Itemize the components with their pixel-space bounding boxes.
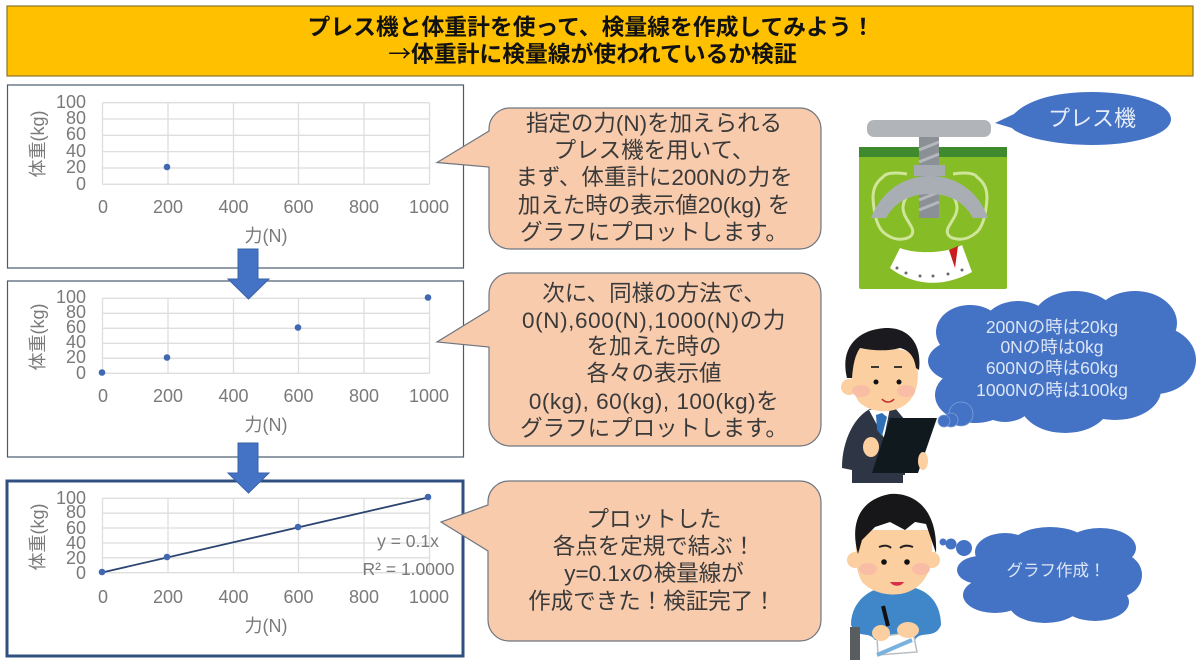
panel: chart step 1: 0 (76, 174, 86, 194)
cloud: measured values: 0Nの時は0kg (1000, 337, 1104, 357)
panel: chart step 1: 1000 (409, 197, 449, 217)
panel: chart step 1: 0 (98, 197, 108, 217)
cloud: graph creation: グラフ作成！ (1006, 561, 1106, 580)
panel: chart step 3 with calibration line: 0 (76, 563, 86, 583)
cloud: measured values: 600Nの時は60kg (986, 358, 1118, 378)
title banner (7, 6, 1193, 76)
panel: chart step 2 (8, 281, 464, 457)
callout: step 1: まず、体重計に200Nの力を (515, 165, 793, 190)
icon: man with clipboard (841, 328, 937, 483)
panel: chart step 2: 40 (66, 332, 86, 352)
panel: chart step 3 with calibration line: 200 (153, 587, 183, 607)
cloud: measured values: 1000Nの時は100kg (976, 380, 1128, 400)
panel: chart step 1: 体重(kg) (28, 110, 48, 178)
panel: chart step 2: 体重(kg) (28, 304, 48, 370)
callout: step 2: を加えた時の (586, 334, 722, 359)
callout: step 1: グラフにプロットします。 (520, 220, 788, 245)
title banner: →体重計に検量線が使われているか検証 (388, 36, 797, 69)
callout: step 2: グラフにプロットします。 (520, 416, 788, 441)
callout: step 2: 各々の表示値 (586, 361, 722, 386)
panel: chart step 2: 20 (66, 347, 86, 367)
callout: press machine label (995, 92, 1171, 145)
panel: chart step 1 (8, 85, 464, 268)
panel: chart step 1: 60 (66, 124, 86, 144)
callout: step 1: 加えた時の表示値20(kg) を (518, 193, 790, 218)
panel: chart step 3 with calibration line: 体重(kg) (28, 504, 48, 570)
panel: chart step 3 with calibration line: 100 (56, 488, 86, 508)
panel: chart step 1: 20 (66, 157, 86, 177)
panel: chart step 3 with calibration line (7, 481, 463, 656)
panel: chart step 1: 100 (56, 92, 86, 112)
panel: chart step 3 with calibration line: 0 (98, 587, 108, 607)
panel: chart step 2: 800 (349, 386, 379, 406)
panel: chart step 1: 力(N) (244, 226, 288, 246)
panel: chart step 1: 600 (283, 197, 314, 217)
panel: chart step 2: 100 (56, 287, 86, 307)
panel: chart step 2: 0 (76, 363, 86, 383)
callout: step 3: プロットした (586, 507, 722, 532)
panel: chart step 1: 80 (66, 108, 86, 128)
regression equation: y = 0.1x (377, 531, 439, 551)
panel: chart step 3 with calibration line: 1000 (409, 587, 449, 607)
data point (164, 164, 170, 170)
callout: step 1 (437, 108, 821, 249)
trendline (102, 498, 428, 572)
callout: step 3: 作成できた！検証完了！ (528, 589, 776, 614)
callout: step 2 (437, 273, 821, 446)
panel: chart step 2: 60 (66, 317, 86, 337)
data points (99, 494, 431, 575)
callout: step 3: y=0.1xの検量線が (564, 561, 744, 586)
callout: step 2: 0(kg), 60(kg), 100(kg)を (529, 389, 779, 414)
panel: chart step 2: 200 (153, 386, 183, 406)
panel: chart step 2: 力(N) (244, 415, 288, 435)
panel: chart step 2: 1000 (409, 386, 449, 406)
regression equation: R² = 1.0000 (363, 559, 455, 579)
panel: chart step 3 with calibration line: 40 (66, 533, 86, 553)
icon: man drawing a graph (847, 494, 941, 660)
panel: chart step 1: 40 (66, 141, 86, 161)
panel: chart step 3 with calibration line: 60 (66, 518, 86, 538)
callout: press machine label: プレス機 (1048, 106, 1136, 131)
regression equation (363, 531, 455, 579)
data points (99, 294, 431, 376)
panel: chart step 3 with calibration line: 800 (349, 587, 379, 607)
panel: chart step 1: 400 (218, 197, 249, 217)
callout: step 2: 次に、同様の方法で、 (542, 281, 766, 306)
panel: chart step 3 with calibration line: 600 (283, 587, 314, 607)
arrow: step 2 to step 3 (228, 443, 269, 493)
panel: chart step 1: 800 (349, 197, 379, 217)
panel: chart step 1: 200 (153, 197, 183, 217)
callout: step 1: 指定の力(N)を加えられる (526, 111, 782, 136)
cloud: measured values: 200Nの時は20kg (986, 317, 1118, 337)
panel: chart step 2: 0 (98, 386, 108, 406)
panel: chart step 3 with calibration line: 400 (218, 587, 249, 607)
callout: step 1: プレス機を用いて、 (554, 138, 754, 163)
arrow: step 1 to step 2 (228, 249, 269, 299)
cloud: measured values (928, 291, 1196, 433)
panel: chart step 3 with calibration line: 80 (66, 502, 86, 522)
panel: chart step 3 with calibration line: 20 (66, 548, 86, 568)
callout: step 3: 各点を定規で結ぶ！ (553, 534, 755, 559)
panel: chart step 2: 400 (218, 386, 249, 406)
panel: chart step 3 with calibration line: 力(N) (244, 616, 288, 636)
panel: chart step 2: 600 (283, 386, 314, 406)
callout: step 3 (441, 481, 821, 641)
cloud: graph creation (940, 527, 1142, 623)
icon: press machine scale (859, 120, 1007, 289)
panel: chart step 2: 80 (66, 302, 86, 322)
callout: step 2: 0(N),600(N),1000(N)の力 (522, 308, 786, 333)
title banner: プレス機と体重計を使って、検量線を作成してみよう！ (308, 14, 874, 40)
